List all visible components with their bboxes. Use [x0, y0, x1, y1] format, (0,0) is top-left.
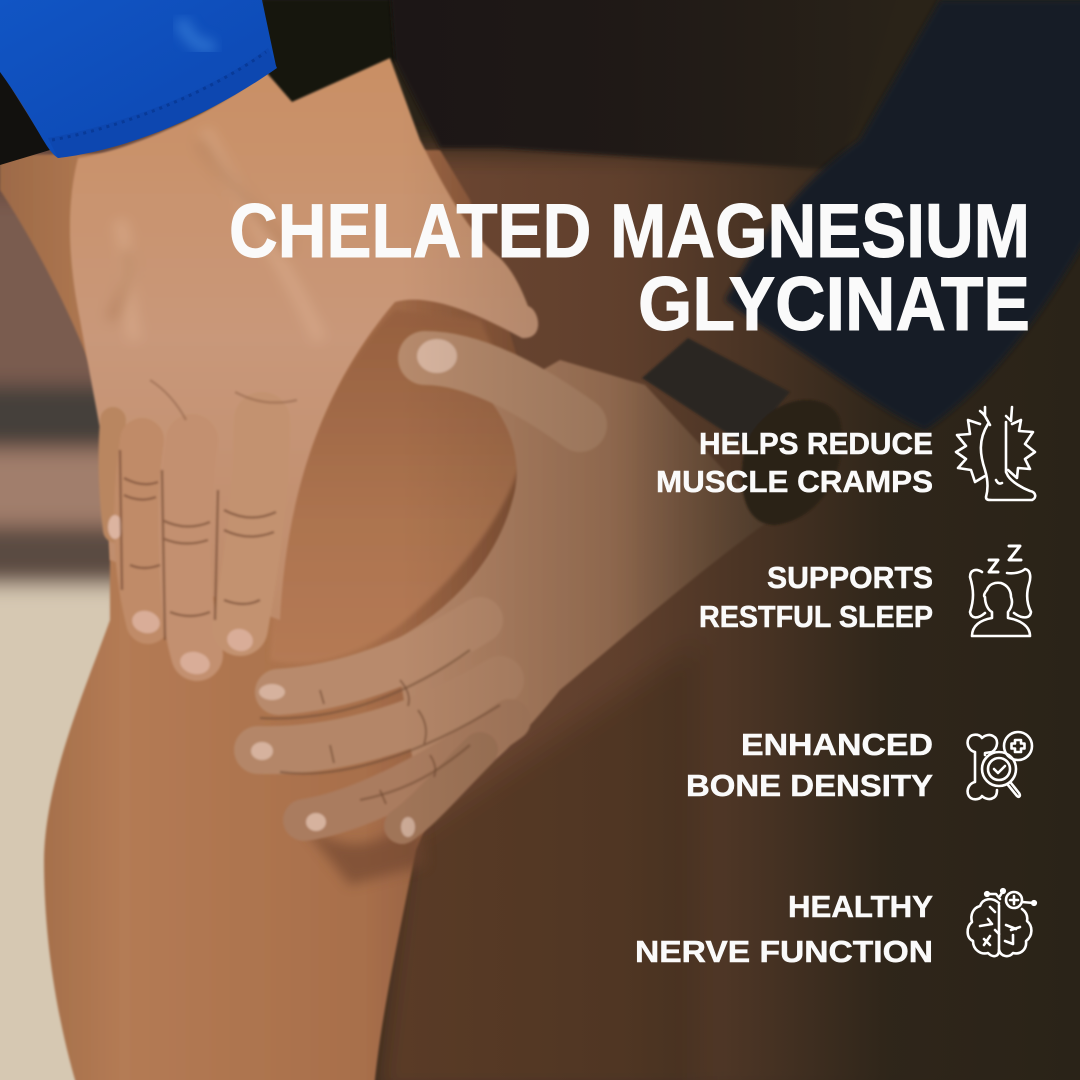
shorts	[262, 0, 402, 102]
benefit: healthy nerve function: NERVE FUNCTION	[635, 934, 933, 969]
right hand nails and creases	[251, 650, 500, 837]
benefit: enhanced bone density	[686, 727, 933, 803]
navy sleeve on the right	[725, 0, 1080, 430]
left hand gripping knee	[70, 58, 538, 677]
benefit: healthy nerve function	[635, 889, 933, 969]
index finger	[240, 420, 262, 628]
pinky finger	[112, 420, 116, 530]
title	[229, 189, 1030, 347]
fingers	[278, 620, 480, 692]
dark overlay fading to the right	[400, 0, 1080, 1080]
front leg	[0, 150, 560, 1080]
ring finger	[136, 440, 148, 622]
tendon highlights	[120, 130, 320, 340]
title: GLYCINATE	[638, 262, 1030, 347]
benefit: supports restful sleep: SUPPORTS	[767, 560, 933, 595]
finger gaps and knuckle creases	[120, 380, 297, 640]
benefit: supports restful sleep: RESTFUL SLEEP	[699, 599, 933, 634]
icon: leg with cramp burst	[956, 407, 1035, 500]
benefit: enhanced bone density: ENHANCED	[741, 727, 933, 762]
sports watch	[642, 338, 842, 525]
kneecap	[270, 310, 530, 663]
right hand gripping knee	[251, 339, 770, 837]
back of hand	[70, 58, 538, 620]
blue jacket sleeve	[0, 0, 277, 158]
back leg and thigh	[370, 150, 1080, 1080]
middle finger	[185, 440, 197, 655]
benefit: helps reduce muscle cramps: HELPS REDUCE	[699, 426, 933, 461]
blurred background track and stands	[0, 0, 180, 1080]
benefit: healthy nerve function: HEALTHY	[788, 889, 933, 924]
icon: bone with magnifier	[968, 732, 1032, 799]
fingernails	[108, 515, 122, 539]
benefit: enhanced bone density: BONE DENSITY	[686, 768, 933, 803]
icon: person sleeping on pillow	[970, 546, 1031, 636]
benefit: supports restful sleep	[699, 560, 933, 634]
hand shadow creases	[110, 140, 290, 320]
thumb	[425, 358, 580, 425]
icon: brain with nerve nodes	[968, 889, 1036, 956]
palm and wrist	[395, 360, 770, 810]
shadow under fingers	[290, 810, 425, 885]
benefit: helps reduce muscle cramps: MUSCLE CRAMPS	[656, 464, 933, 499]
benefit: helps reduce muscle cramps	[656, 426, 933, 499]
